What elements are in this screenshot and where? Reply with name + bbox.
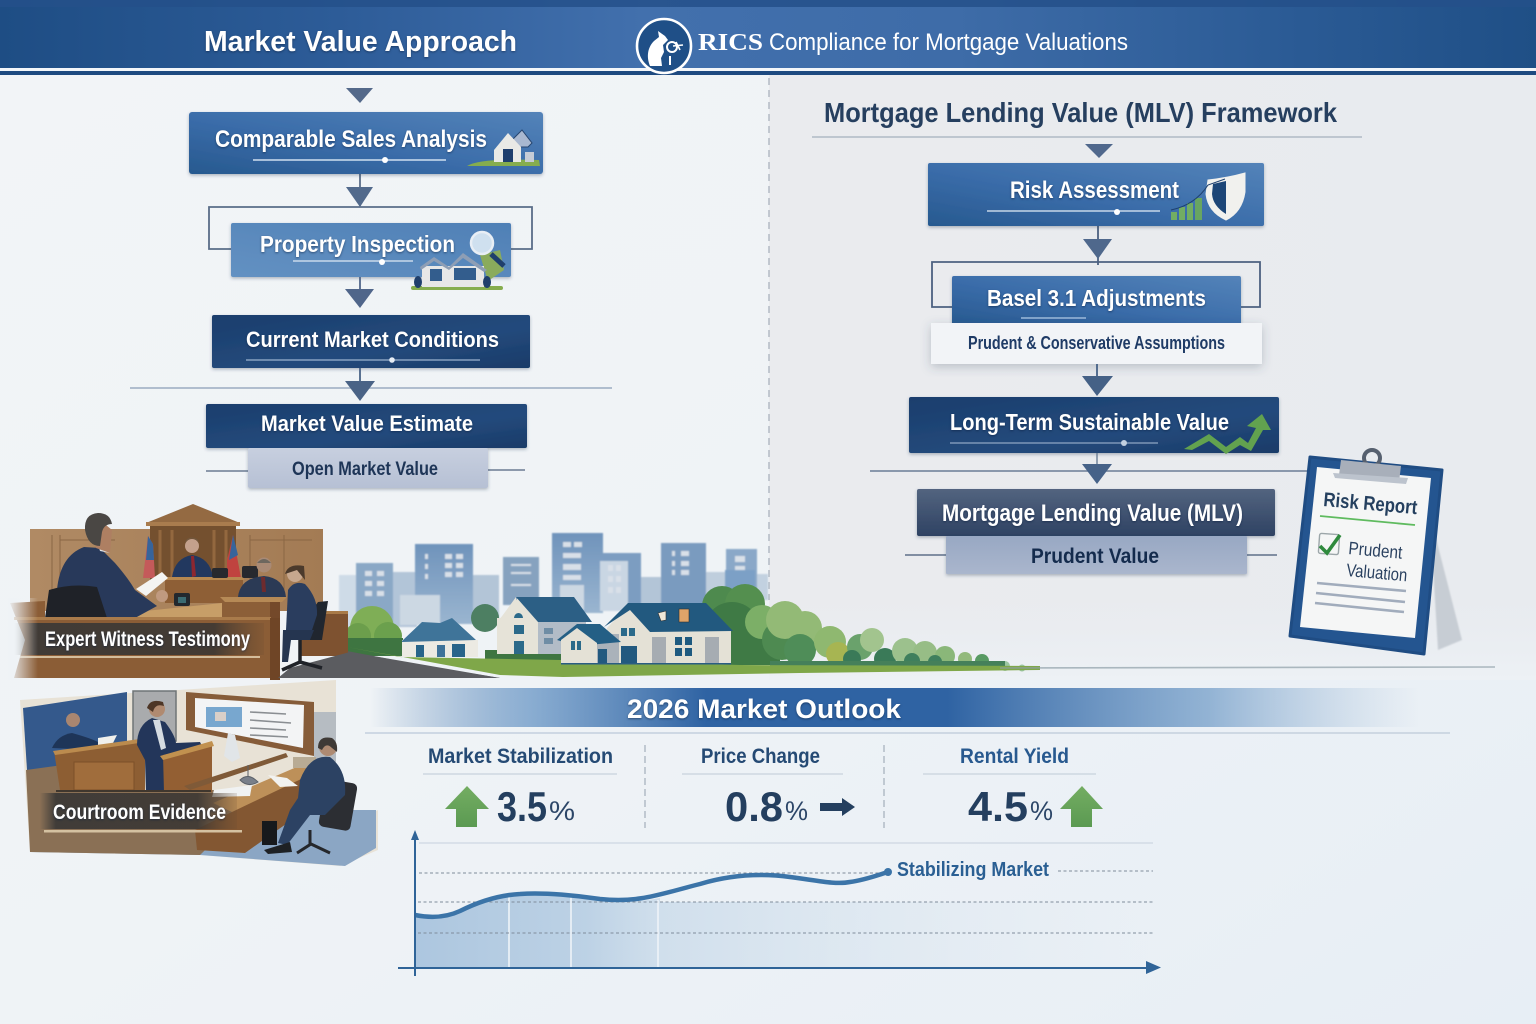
room backdrop (20, 680, 378, 866)
chart label: Stabilizing Market (897, 859, 1049, 881)
clipboard text: Prudent (1348, 538, 1403, 563)
metric: rental yield (923, 745, 1103, 830)
road (320, 651, 500, 678)
clipboard title: Risk Report (1323, 489, 1418, 519)
box: property inspection: Property Inspection (260, 231, 455, 257)
metric: market stabilization: 3.5 (497, 783, 547, 830)
box: prudent value: Prudent Value (1031, 545, 1159, 568)
connector: rule above MLV (870, 453, 1307, 471)
illustration: city and neighbourhood (320, 533, 1040, 678)
arrow: into risk assessment (1085, 144, 1113, 158)
caption: courtroom evidence: Courtroom Evidence (53, 801, 226, 824)
box: prudent value (946, 536, 1247, 574)
caption: expert witness testimony: Expert Witness Testimony (45, 628, 250, 651)
side wall (314, 712, 336, 762)
chart area fill (415, 893, 660, 968)
arrow: inspection to conditions (345, 277, 374, 308)
icon: RICS logo (637, 19, 691, 73)
box: market value estimate (206, 404, 527, 448)
box: risk assessment (928, 163, 1264, 226)
seated analyst (262, 737, 358, 854)
y axis (411, 830, 419, 976)
house: main (557, 603, 733, 664)
judge bench (160, 566, 258, 603)
box: prudent and conservative assumptions (931, 323, 1262, 364)
bench (53, 738, 147, 790)
heading: market value approach: Market Value Approach (204, 26, 517, 58)
skyline (339, 533, 768, 630)
box: comparable sales analysis (189, 112, 543, 174)
icon: shield with bars (1171, 173, 1245, 220)
connector: open market lines (206, 470, 525, 471)
clipboard text: Valuation (1346, 560, 1408, 585)
lawyer chair (45, 586, 107, 618)
desk front and label (8, 598, 280, 680)
witness chair base (282, 640, 322, 670)
lawn (347, 647, 1040, 677)
divider (883, 745, 885, 828)
box: prudent and conservative assumptions: Prudent & Conservative Assumptions (968, 333, 1225, 353)
connector bracket: property inspection (209, 174, 532, 249)
connector: prudent value lines (905, 554, 1277, 556)
icon: magnifier and houses (411, 232, 504, 290)
podium (160, 741, 214, 792)
metric: price change: 0.8 (725, 783, 783, 830)
arrow: comparable to inspection (346, 187, 373, 207)
section: 2026 market outlook (365, 688, 1450, 976)
arrow: assumptions to long-term (1082, 364, 1113, 396)
box: open market value (248, 448, 488, 488)
box: Basel 3.1 adjustments: Basel 3.1 Adjustments (987, 285, 1206, 311)
panel: MLV framework flow (812, 97, 1362, 574)
lawyer desk top (100, 603, 222, 619)
lower wall and label backing (26, 764, 236, 855)
divider between panels (768, 78, 770, 600)
divider (644, 745, 646, 828)
heading: RICS compliance: Compliance for Mortgage Valuations (769, 29, 1128, 56)
standing attorney (137, 701, 202, 792)
box: long-term sustainable value (909, 397, 1279, 454)
wall panelling (30, 529, 323, 611)
arrow: long-term to MLV (1082, 464, 1112, 484)
header banner (0, 0, 1536, 75)
arrow: into comparable sales (346, 88, 373, 103)
metric: market stabilization (423, 745, 617, 830)
box: risk assessment: Risk Assessment (1010, 177, 1179, 204)
line chart: stabilizing market (398, 830, 1161, 976)
seated figure at bench (52, 713, 117, 750)
floor (30, 810, 376, 866)
heading underline (812, 136, 1362, 138)
lawyer figure (57, 513, 190, 618)
connector bracket: Basel (932, 226, 1260, 307)
outlook banner (370, 688, 1420, 727)
box: current market conditions: Current Market Conditions (246, 327, 499, 352)
house: tall (497, 597, 592, 654)
banner rule (365, 732, 1450, 734)
box: Basel 3.1 adjustments (952, 276, 1241, 326)
chart faded area (660, 902, 1150, 968)
metric: rental yield: 4.5 (968, 783, 1028, 830)
witness box (220, 597, 287, 674)
box: long-term sustainable value: Long-Term Sustainable Value (950, 409, 1229, 435)
box: mortgage lending value (917, 489, 1275, 536)
metric: rental yield: % (1030, 796, 1053, 826)
heading: RICS compliance: RICS (698, 30, 763, 56)
projection screen (186, 692, 314, 756)
seated woman figure (282, 565, 317, 662)
illustration: expert witness testimony courtroom (8, 504, 500, 680)
ground line right (1000, 667, 1495, 668)
trees (345, 584, 1026, 672)
metric: market stabilization: Market Stabilization (428, 745, 613, 768)
box: mortgage lending value: Mortgage Lending Value (MLV) (942, 500, 1243, 527)
house: small (402, 618, 478, 657)
witness figure (238, 558, 286, 597)
box: current market conditions (212, 315, 530, 368)
heading: MLV framework: Mortgage Lending Value (MLV) Framework (824, 97, 1337, 128)
x axis (398, 961, 1161, 974)
grey panel (133, 691, 176, 741)
judge figure (172, 538, 213, 577)
connector: horizontal rule (130, 387, 612, 389)
rear desk and chair (290, 601, 348, 656)
outlook title: 2026 Market Outlook (627, 694, 902, 724)
clipboard clip (1333, 450, 1408, 484)
box: property inspection (231, 223, 511, 290)
arrow: risk to Basel (1083, 239, 1112, 259)
box: comparable sales analysis: Comparable Sales Analysis (215, 126, 487, 153)
icon: green rising arrow (1184, 414, 1271, 454)
icon: risk report clipboard (1290, 450, 1462, 654)
illustration: courtroom evidence (20, 680, 378, 866)
arrow: conditions to estimate (345, 368, 375, 401)
metric: price change (682, 745, 855, 830)
metric: rental yield: Rental Yield (960, 745, 1069, 768)
flags (143, 535, 241, 578)
metric: price change: Price Change (701, 745, 820, 768)
icon: house on lawn (467, 130, 540, 166)
judge canopy (146, 504, 240, 580)
blue wall (23, 692, 127, 770)
road floor (278, 652, 500, 678)
panel: market value approach flow (130, 88, 612, 488)
box: open market value: Open Market Value (292, 459, 438, 480)
background: right panel (769, 74, 1536, 680)
checkbox (1318, 533, 1340, 555)
box: market value estimate: Market Value Estimate (261, 411, 473, 436)
metric: price change: % (785, 796, 808, 826)
court table (184, 733, 330, 853)
metric: market stabilization: % (549, 796, 575, 826)
clipboard text (1346, 538, 1408, 585)
label background (40, 790, 242, 832)
